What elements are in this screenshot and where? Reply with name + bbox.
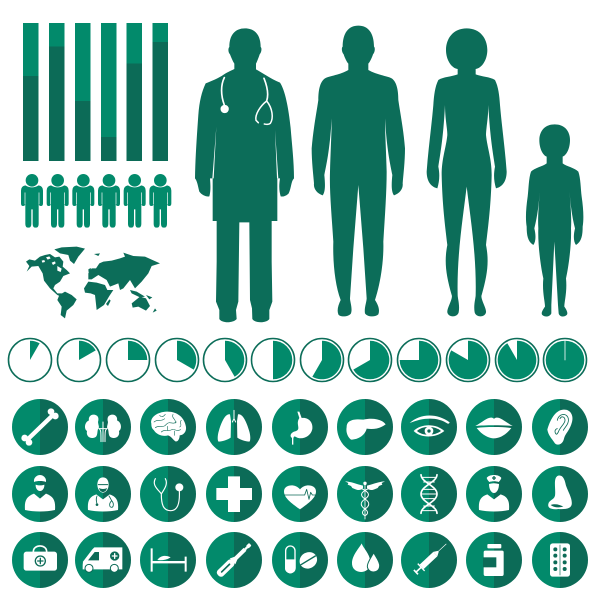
icon: stethoscope on doctor bbox=[220, 78, 272, 124]
pie 9/12 bbox=[398, 338, 440, 382]
panel: medical staff and symbols icon row bbox=[12, 466, 588, 522]
icon: hospital bed bbox=[140, 532, 196, 588]
person 6 bbox=[149, 174, 171, 228]
bar 1 bbox=[23, 23, 38, 161]
icon: liver bbox=[337, 399, 393, 455]
icon: ear bbox=[532, 399, 588, 455]
icon: medicine jar bbox=[466, 532, 522, 588]
bar 3 bbox=[75, 23, 90, 161]
pie 4/12 bbox=[156, 338, 198, 382]
icon: blister pack bbox=[532, 532, 588, 588]
icon: ambulance bbox=[75, 532, 131, 588]
icon: DNA helix bbox=[401, 466, 457, 522]
icon: medical cross bbox=[206, 466, 262, 522]
pie 8/12 bbox=[348, 338, 392, 382]
figure: man silhouette bbox=[312, 26, 405, 316]
icon: nose bbox=[532, 466, 588, 522]
icon: doctor bbox=[75, 466, 131, 522]
icon: stomach bbox=[272, 399, 328, 455]
pie 10/12 bbox=[446, 338, 490, 382]
icon: heart with pulse bbox=[272, 466, 328, 522]
pie 12/12 bbox=[544, 338, 586, 382]
icon: lips bbox=[466, 399, 522, 455]
panel: row of people pictograms bbox=[21, 174, 171, 228]
figure: doctor silhouette bbox=[195, 28, 294, 322]
pie 3/12 bbox=[106, 338, 150, 382]
bar 6 bbox=[152, 23, 168, 161]
icon: drops bbox=[337, 532, 393, 588]
icon: syringe bbox=[401, 532, 457, 588]
icon: nurse bbox=[466, 466, 522, 522]
icon: surgeon bbox=[12, 466, 68, 522]
panel: row of pie progress charts bbox=[8, 338, 586, 382]
icon: pills bbox=[272, 532, 328, 588]
person 1 bbox=[21, 174, 43, 228]
pie 6/12 bbox=[252, 338, 294, 382]
panel: stacked bar chart bbox=[23, 23, 168, 161]
icon: stethoscope bbox=[140, 466, 196, 522]
person 5 bbox=[124, 174, 146, 228]
icon: medical bag bbox=[12, 532, 68, 588]
panel: anatomy icon row bbox=[12, 399, 588, 455]
figure: woman silhouette bbox=[427, 28, 507, 316]
pie 2/12 bbox=[58, 338, 100, 382]
person 2 bbox=[47, 174, 69, 228]
pie 11/12 bbox=[496, 338, 538, 382]
icon: lungs bbox=[206, 399, 262, 455]
pie 7/12 bbox=[300, 338, 344, 382]
pie 1/12 bbox=[8, 338, 52, 382]
person 4 bbox=[98, 174, 120, 228]
world map bbox=[26, 247, 160, 318]
icon: brain bbox=[140, 399, 196, 455]
bar 2 bbox=[49, 23, 64, 161]
icon: kidneys bbox=[75, 399, 131, 455]
icon: eye bbox=[401, 399, 457, 455]
panel: care and medicine icon row bbox=[12, 532, 588, 588]
icon: caduceus bbox=[337, 466, 393, 522]
figure: child silhouette bbox=[526, 124, 583, 317]
bar 5 bbox=[126, 23, 142, 161]
pie 5/12 bbox=[204, 338, 246, 382]
icon: thermometer bbox=[206, 532, 262, 588]
person 3 bbox=[72, 174, 94, 228]
icon: bone bbox=[12, 399, 68, 455]
bar 4 bbox=[101, 23, 116, 161]
